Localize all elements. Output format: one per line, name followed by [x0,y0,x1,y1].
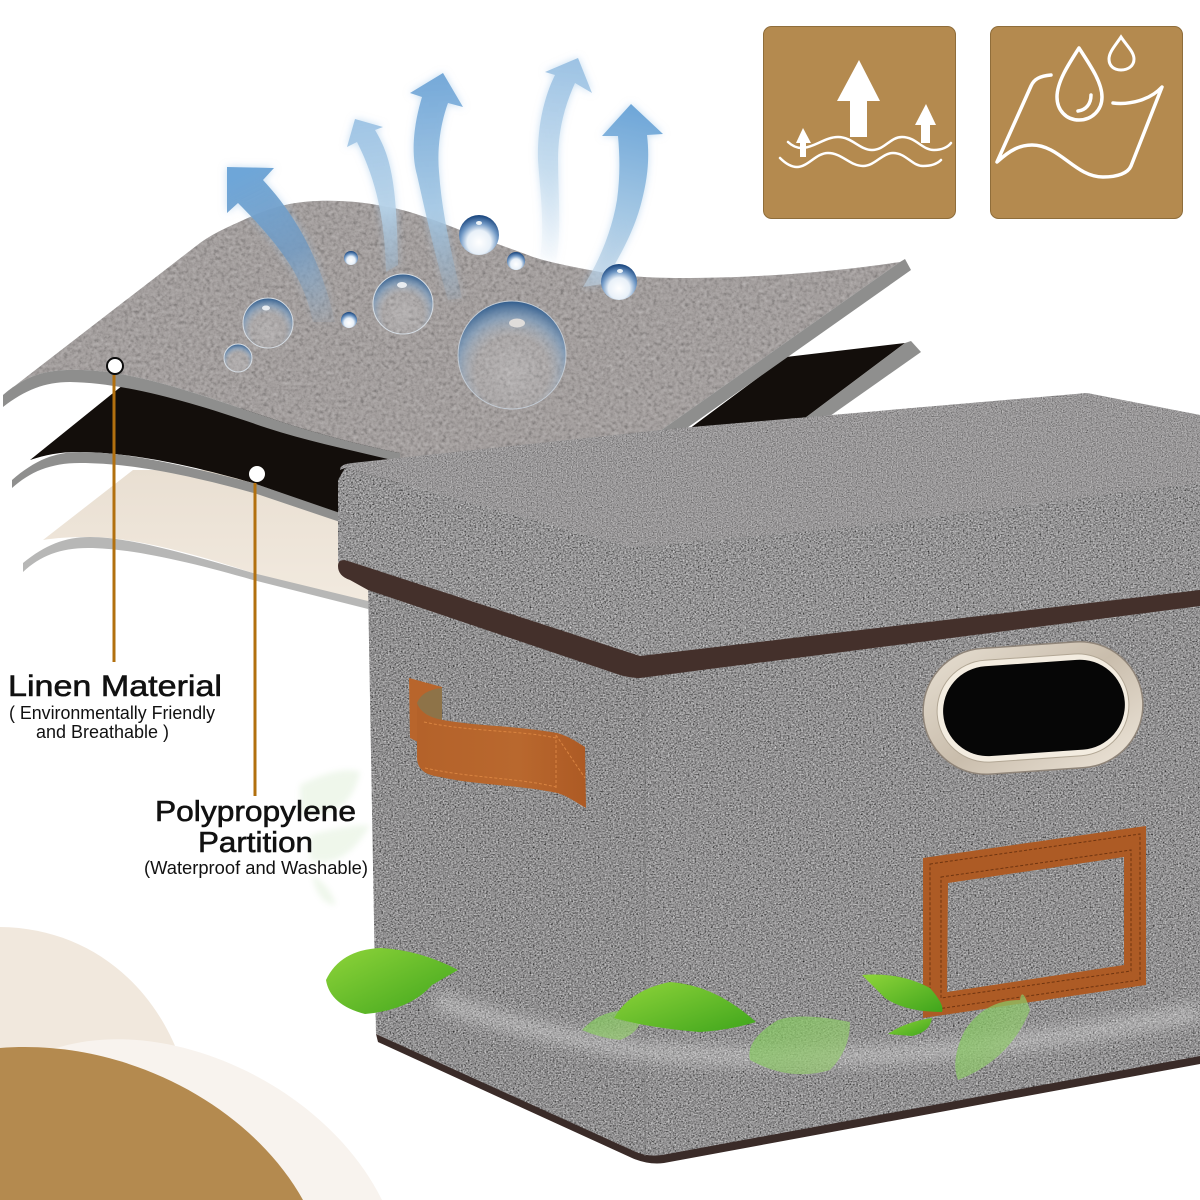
waves [780,137,951,167]
label: linen material: ( Environmentally Friendly [9,703,215,723]
water droplets [224,215,637,409]
decorative tan hills bottom-left [0,927,382,1200]
right arrow [915,104,936,143]
linen storage box [338,393,1200,1163]
arrows: rising moisture [227,58,663,322]
arrow 4 [538,58,592,262]
leaf 4 [862,975,942,1012]
leather strap handle [409,678,586,808]
lid sides [338,468,1200,660]
large droplet [1057,48,1102,120]
faded leaf 3 [749,1016,850,1074]
pale ghost leaves [300,770,370,905]
air swoosh [436,1000,1200,1057]
layer: cream lining [23,470,372,610]
leather label holder [923,826,1146,1018]
big arrow [837,60,880,137]
icon: breathable arrows [764,26,956,218]
small droplet [1109,37,1134,70]
arrow 5 [583,104,663,287]
label: polypropylene partition: Polypropylene [155,796,356,828]
box left face [368,586,645,1158]
icon tile [764,26,956,218]
icon: waterproof fabric [990,26,1182,218]
lid piping [338,560,1200,678]
metal handle grommet [919,637,1147,779]
droplet highlight [1078,95,1091,111]
leader line: linen material [107,358,123,662]
label: linen material [8,670,222,742]
label: polypropylene partition: Partition [198,827,313,859]
bottom trim [376,1034,1200,1163]
leaf 5 [888,1018,932,1036]
arrow 3 [410,73,463,300]
leaf 1 [326,948,458,1014]
left arrow [796,128,811,157]
label: polypropylene partition [144,796,368,878]
faded leaf behind [582,1010,641,1040]
label: linen material: Linen Material [8,670,222,703]
label: linen material: and Breathable ) [36,722,169,742]
box corner seam [644,682,646,1156]
fabric outline [997,75,1162,177]
box front face [645,600,1200,1162]
layer: linen top sheet [3,201,911,470]
leaves [300,770,1030,1080]
icon tile [990,26,1182,218]
arrow 2 [347,119,398,272]
lid top face [340,393,1200,547]
arrow 1 [227,167,335,322]
layer: black polypropylene partition [12,341,921,530]
faded leaf 6 [955,994,1030,1080]
leaf 2 [614,982,756,1032]
leader line: polypropylene partition [249,466,265,796]
label: polypropylene partition: (Waterproof and Washable) [144,857,368,878]
